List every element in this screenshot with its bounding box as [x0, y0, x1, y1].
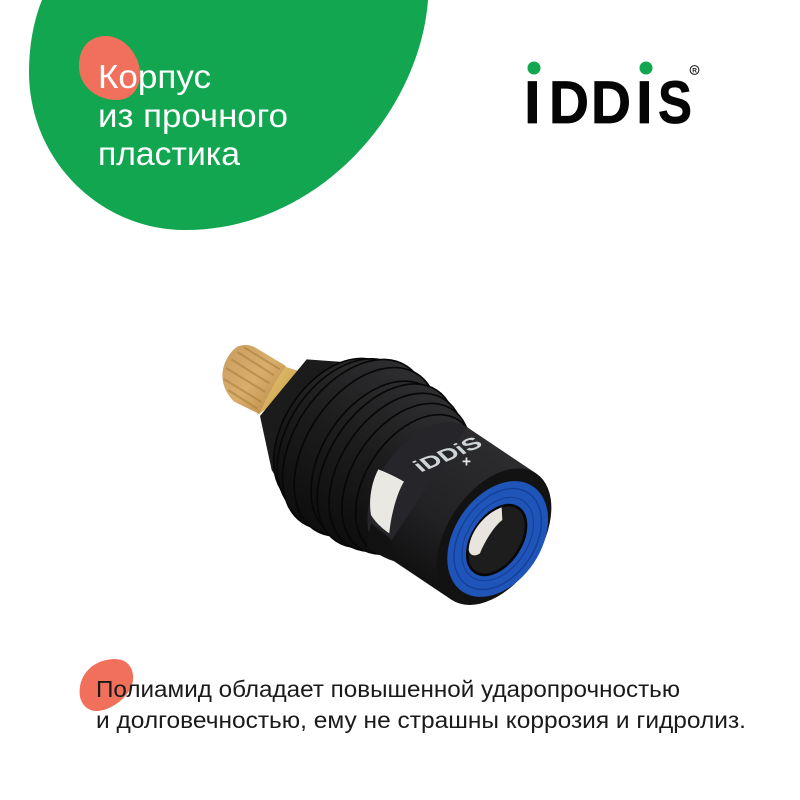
heading: из прочного [98, 97, 288, 134]
plus mark: + [462, 454, 471, 471]
green corner blob [29, 0, 428, 230]
brass splined stem [222, 345, 286, 414]
logo: IDDIS: R [692, 67, 697, 74]
engraved iddis mark: iDDiS [408, 433, 487, 476]
ring opening [455, 495, 538, 585]
caption text [96, 676, 746, 733]
product photo: cartridge [222, 325, 575, 626]
cylinder body along axis [241, 325, 510, 591]
coral accent caption [80, 659, 133, 711]
caption text: Полиамид обладает повышенной ударопрочностью [96, 676, 680, 702]
logo: IDDIS: D [549, 69, 589, 136]
caption text: и долговечностью, ему не страшны коррозия и гидролиз. [96, 707, 746, 733]
heading [98, 58, 288, 172]
logo: IDDIS: I [524, 69, 541, 136]
heading: Корпус [98, 58, 211, 95]
dark lower cutout [367, 523, 397, 562]
logo: IDDIS: I [636, 69, 653, 136]
blue seal ring [426, 462, 569, 616]
logo: IDDIS: D [591, 69, 631, 136]
coral accent heading [79, 36, 140, 100]
white inner window [370, 469, 404, 533]
front cap cylinder [344, 401, 536, 600]
white inner core [469, 507, 502, 555]
front cap rim [413, 448, 575, 626]
heading: пластика [98, 135, 241, 172]
brass neck [257, 365, 297, 415]
hex flange [260, 359, 387, 517]
logo: IDDIS: S [658, 69, 692, 136]
logo: IDDIS [524, 62, 699, 136]
thread rings [241, 325, 510, 591]
